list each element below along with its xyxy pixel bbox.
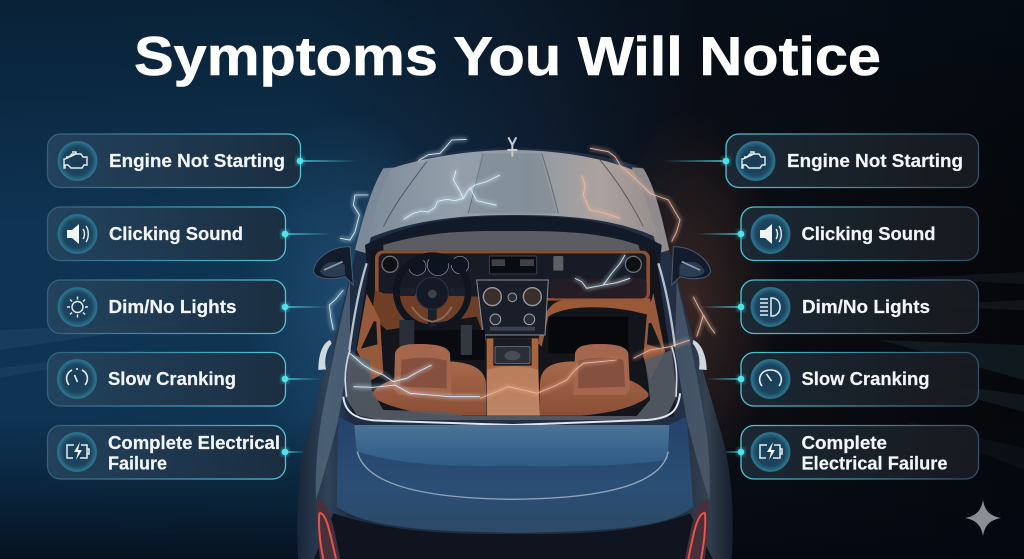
instrument vents	[382, 256, 398, 272]
pill: complete electrical failure (right): Electrical Failure	[802, 452, 948, 474]
pill: clicking sound (left)	[48, 207, 288, 260]
cabin rim	[343, 263, 680, 425]
infotainment screen	[489, 256, 537, 274]
tail lights	[316, 500, 709, 559]
pill: clicking sound (left): Clicking Sound	[109, 223, 243, 244]
windshield frame	[365, 216, 662, 263]
side mirrors	[313, 247, 711, 285]
pill: slow cranking (right)	[738, 352, 978, 406]
door panels	[357, 293, 665, 380]
car body	[297, 148, 733, 559]
pill: complete electrical failure (right)	[738, 426, 978, 479]
pill: dim/no lights (right)	[738, 280, 978, 334]
seats	[372, 344, 648, 416]
pill: dim/no lights (left)	[48, 280, 288, 334]
pill: engine not starting (left)	[48, 134, 303, 188]
console	[487, 338, 540, 416]
dashboard	[372, 251, 653, 347]
pill: slow cranking (left): Slow Cranking	[108, 368, 236, 389]
interior tub	[348, 250, 677, 417]
pill: dim/no lights (right): Dim/No Lights	[802, 296, 930, 317]
panel: left symptoms	[48, 134, 303, 479]
steering wheel	[396, 256, 468, 328]
rear deck	[337, 417, 693, 533]
hood	[368, 150, 658, 238]
pill: dim/no lights (left): Dim/No Lights	[108, 296, 236, 317]
pill: engine not starting (right): Engine Not Starting	[787, 150, 963, 171]
pill: slow cranking (right): Slow Cranking	[802, 368, 930, 389]
footwell	[399, 317, 628, 360]
car illustration	[297, 137, 733, 559]
panel: right symptoms	[723, 134, 978, 479]
lightning: blue	[329, 139, 630, 397]
center stack	[477, 280, 548, 335]
pill: complete electrical failure (left): Failure	[108, 452, 167, 474]
door handles	[318, 340, 707, 370]
title: Symptoms You Will Notice	[134, 25, 881, 87]
icon: sparkle watermark	[965, 500, 1001, 536]
pill: clicking sound (right): Clicking Sound	[802, 223, 936, 244]
pill: engine not starting (left): Engine Not Starting	[109, 150, 285, 171]
pill: clicking sound (right)	[738, 207, 978, 260]
lightning: orange	[480, 148, 715, 398]
dash top	[383, 231, 640, 251]
hood ornament	[507, 137, 517, 157]
rear bumper	[313, 513, 713, 559]
pill: complete electrical failure (right): Complete	[802, 432, 887, 453]
pill: complete electrical failure (left): Complete Electrical	[108, 432, 280, 453]
gauges	[409, 258, 426, 275]
pill: complete electrical failure (left)	[48, 426, 288, 479]
pill: slow cranking (left)	[48, 352, 288, 406]
pill: engine not starting (right)	[723, 134, 978, 188]
shoulder highlights	[316, 167, 710, 500]
connector lines	[285, 160, 741, 453]
